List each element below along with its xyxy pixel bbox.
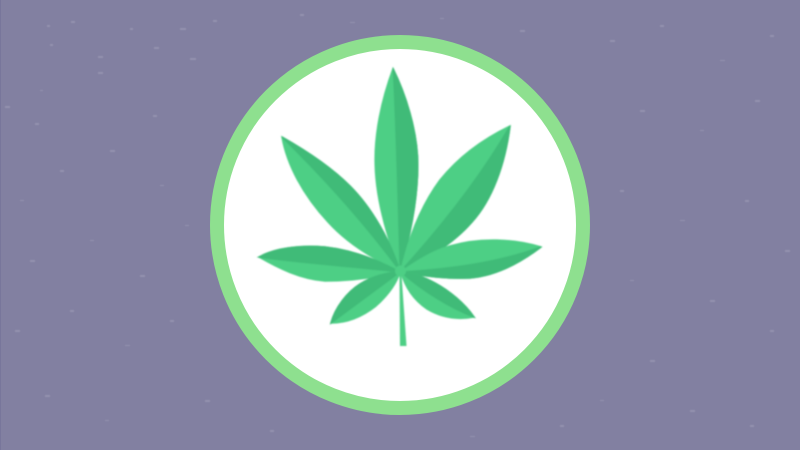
leaflet: upper right	[401, 126, 510, 271]
leaflet: right	[401, 240, 541, 278]
icon: leaf	[259, 68, 541, 346]
leaflet: upper left	[282, 137, 400, 271]
leaflet: top	[375, 68, 418, 272]
stem	[395, 266, 406, 346]
leaflet: left	[259, 246, 400, 281]
leaflet: lower left	[331, 272, 400, 323]
emblem circle: white disc with green ring	[217, 42, 583, 408]
leaflet: lower right	[401, 272, 474, 318]
